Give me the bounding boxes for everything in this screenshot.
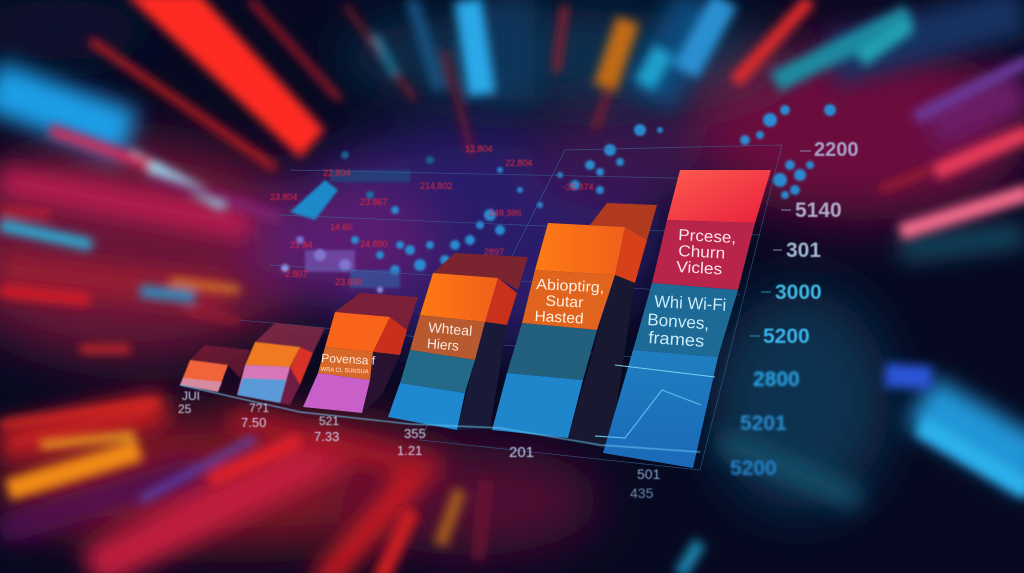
bar 5 label: Hasted <box>534 308 584 328</box>
bar 3 label: Povensa f <box>321 351 376 368</box>
x axis labels: 7?1 <box>249 401 269 415</box>
red data labels: 2.807 <box>285 269 308 279</box>
y axis labels: 2800 <box>753 368 800 391</box>
baseline glow line <box>180 385 700 452</box>
bar 4 label: Hiers <box>426 335 460 354</box>
x axis labels: 1.21 <box>397 443 422 458</box>
bar 6 blue label: Bonves, <box>647 310 710 333</box>
red data labels: 248,986 <box>489 208 522 218</box>
red data labels: 2897 <box>484 247 504 257</box>
bar 3 <box>303 293 418 413</box>
x axis labels: 201 <box>509 444 534 461</box>
bar 6 <box>595 170 771 468</box>
red data labels: 23.890 <box>335 277 363 287</box>
bar 6 trend line <box>595 390 701 438</box>
x axis labels: 25 <box>178 402 192 416</box>
y axis ticks <box>750 151 811 336</box>
panel: chart grid <box>240 145 782 470</box>
y axis labels: 5200 <box>763 325 810 348</box>
bar 5 label: Abioptirg, <box>536 276 605 297</box>
bar 2 <box>237 323 325 405</box>
bar 4 label <box>426 319 473 355</box>
x axis labels: 355 <box>404 426 426 441</box>
red data labels: 22.804 <box>323 168 351 178</box>
red data labels: 22.804 <box>505 158 533 168</box>
red data labels: -32.374 <box>563 182 594 192</box>
red data labels: 14.60 <box>330 222 353 232</box>
x axis labels: 7.50 <box>241 415 266 430</box>
y axis labels <box>730 139 858 480</box>
bar 6 red label: Prcese, <box>678 227 737 247</box>
y axis labels: 3000 <box>775 281 822 304</box>
panel: data particles <box>281 104 836 312</box>
red data labels: 12.804 <box>465 144 493 154</box>
bar 5 label: Sutar <box>545 293 584 311</box>
bar 5 <box>492 203 657 450</box>
red data labels: 24.890 <box>360 239 388 249</box>
y axis labels: 5200 <box>730 457 777 480</box>
x axis labels: 521 <box>319 414 339 428</box>
bar 6 blue label: frames <box>648 328 705 351</box>
red data labels: 23.804 <box>270 192 298 202</box>
bar 3 label: WRA CL SUNSUA <box>320 367 369 375</box>
y axis labels: 5140 <box>795 199 842 222</box>
red data labels: 21.84 <box>290 240 313 250</box>
y axis labels: 2200 <box>814 139 858 161</box>
bar 4 label: Whteal <box>428 319 473 339</box>
y axis labels: 301 <box>786 239 821 262</box>
red data labels: 23.867 <box>360 197 388 207</box>
x axis labels: 501 <box>637 466 661 482</box>
x axis labels: JUI <box>182 389 200 403</box>
red data labels: 214,802 <box>420 181 453 191</box>
bar 4 <box>388 253 528 430</box>
bar 6 red label: Vicles <box>676 259 723 278</box>
bar 6 blue label: Whi Wi-Fi <box>654 292 727 315</box>
bar 1 <box>180 345 250 392</box>
x axis labels: 435 <box>630 485 654 501</box>
red data labels <box>270 144 594 287</box>
bar 3 label <box>320 351 376 376</box>
y axis labels: 5201 <box>740 412 787 435</box>
x axis labels: 7.33 <box>314 429 339 444</box>
bar 6 blue label <box>647 292 727 351</box>
bar 6 red label <box>676 227 737 278</box>
bar 6 red label: Churn <box>678 243 726 262</box>
bar 5 label <box>534 276 605 329</box>
x axis labels <box>178 389 661 501</box>
